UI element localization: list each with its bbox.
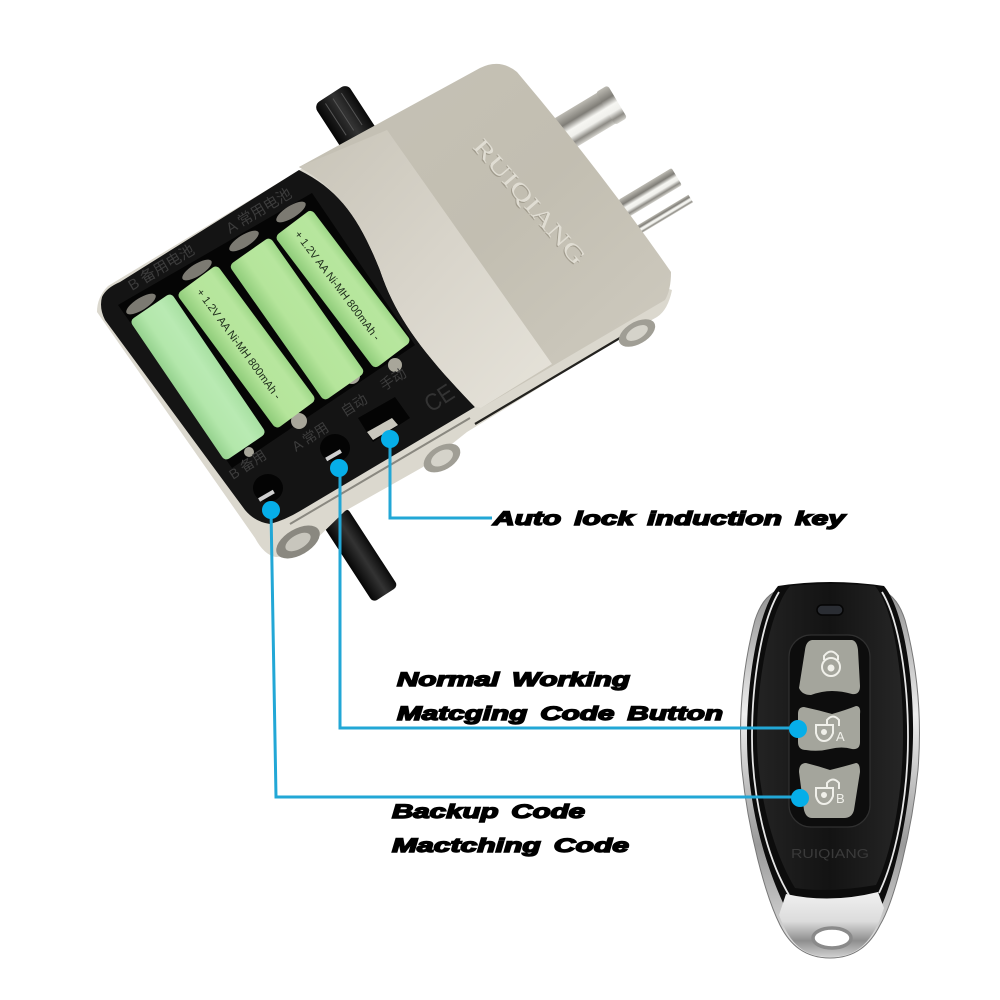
unlock B icon — [816, 780, 839, 804]
brand RUIQIANG: RUIQIANG — [467, 135, 590, 271]
button A — [798, 706, 860, 751]
screw middle — [419, 438, 465, 478]
spring contacts — [123, 198, 309, 318]
battery end screws — [244, 358, 402, 457]
label: B button: B 备用 — [226, 447, 269, 483]
white highlight line — [752, 592, 908, 895]
letter A: A — [836, 729, 845, 744]
label: matcging code button: Matcging Code Button — [397, 704, 723, 725]
bottom black knob — [322, 507, 398, 603]
battery 3 — [229, 237, 365, 401]
lock body — [97, 64, 693, 603]
black face — [757, 584, 903, 890]
screw bottom — [271, 519, 325, 565]
chrome shell — [741, 583, 919, 958]
key ring hole — [813, 928, 851, 948]
LED — [817, 605, 843, 615]
frame seam — [475, 332, 630, 424]
lower steel bolt — [618, 168, 693, 233]
unlock A icon — [816, 716, 839, 741]
button hole B — [253, 474, 283, 502]
callout dots — [262, 430, 809, 807]
label: normal working: Normal Working — [397, 670, 631, 691]
label: manual: 手动 — [377, 365, 409, 394]
battery 2: + 1.2V AA Ni-MH 800mAh - — [194, 287, 283, 402]
top black knob — [314, 83, 380, 156]
chrome base — [779, 892, 884, 957]
brand on remote: RUIQIANG — [791, 846, 869, 861]
battery bay — [118, 193, 415, 468]
screw right — [614, 313, 660, 353]
line: auto lock — [390, 439, 492, 518]
callout lines — [271, 439, 800, 797]
battery 1 — [130, 293, 266, 461]
lock icon — [822, 652, 840, 676]
label: auto lock induction key: Auto lock induction key — [491, 509, 847, 530]
remote control — [741, 582, 919, 958]
brushed steel cover — [299, 64, 671, 408]
line: backup code — [271, 510, 800, 797]
top button — [799, 640, 860, 695]
brand RUIQIANG: RUIQIANG — [468, 134, 591, 270]
black battery panel — [101, 170, 475, 524]
CE mark: CE — [420, 379, 459, 418]
line: normal working — [340, 468, 798, 728]
outer black rim — [747, 582, 913, 910]
battery 4 — [275, 209, 411, 369]
brand RUIQIANG — [467, 134, 591, 271]
battery 2 — [177, 265, 316, 429]
label: A main battery: A 常用电池 — [223, 185, 295, 237]
letter B: B — [836, 791, 845, 806]
cover fold band — [299, 130, 552, 408]
button surround — [789, 635, 870, 827]
switch — [358, 397, 410, 442]
silver frame — [97, 168, 672, 557]
label: auto: 自动 — [338, 391, 370, 420]
label: backup code: Backup Code — [392, 802, 586, 823]
button B — [799, 763, 860, 818]
upper steel bolt — [549, 85, 627, 153]
battery 4: + 1.2V AA Ni-MH 800mAh - — [292, 229, 382, 343]
label: B backup battery: B 备用电池 — [125, 242, 198, 294]
button hole A — [320, 434, 350, 462]
frame lower stripe — [290, 418, 470, 524]
label: mactching code: Mactching Code — [392, 836, 630, 857]
label: A button: A 常用 — [289, 419, 332, 455]
